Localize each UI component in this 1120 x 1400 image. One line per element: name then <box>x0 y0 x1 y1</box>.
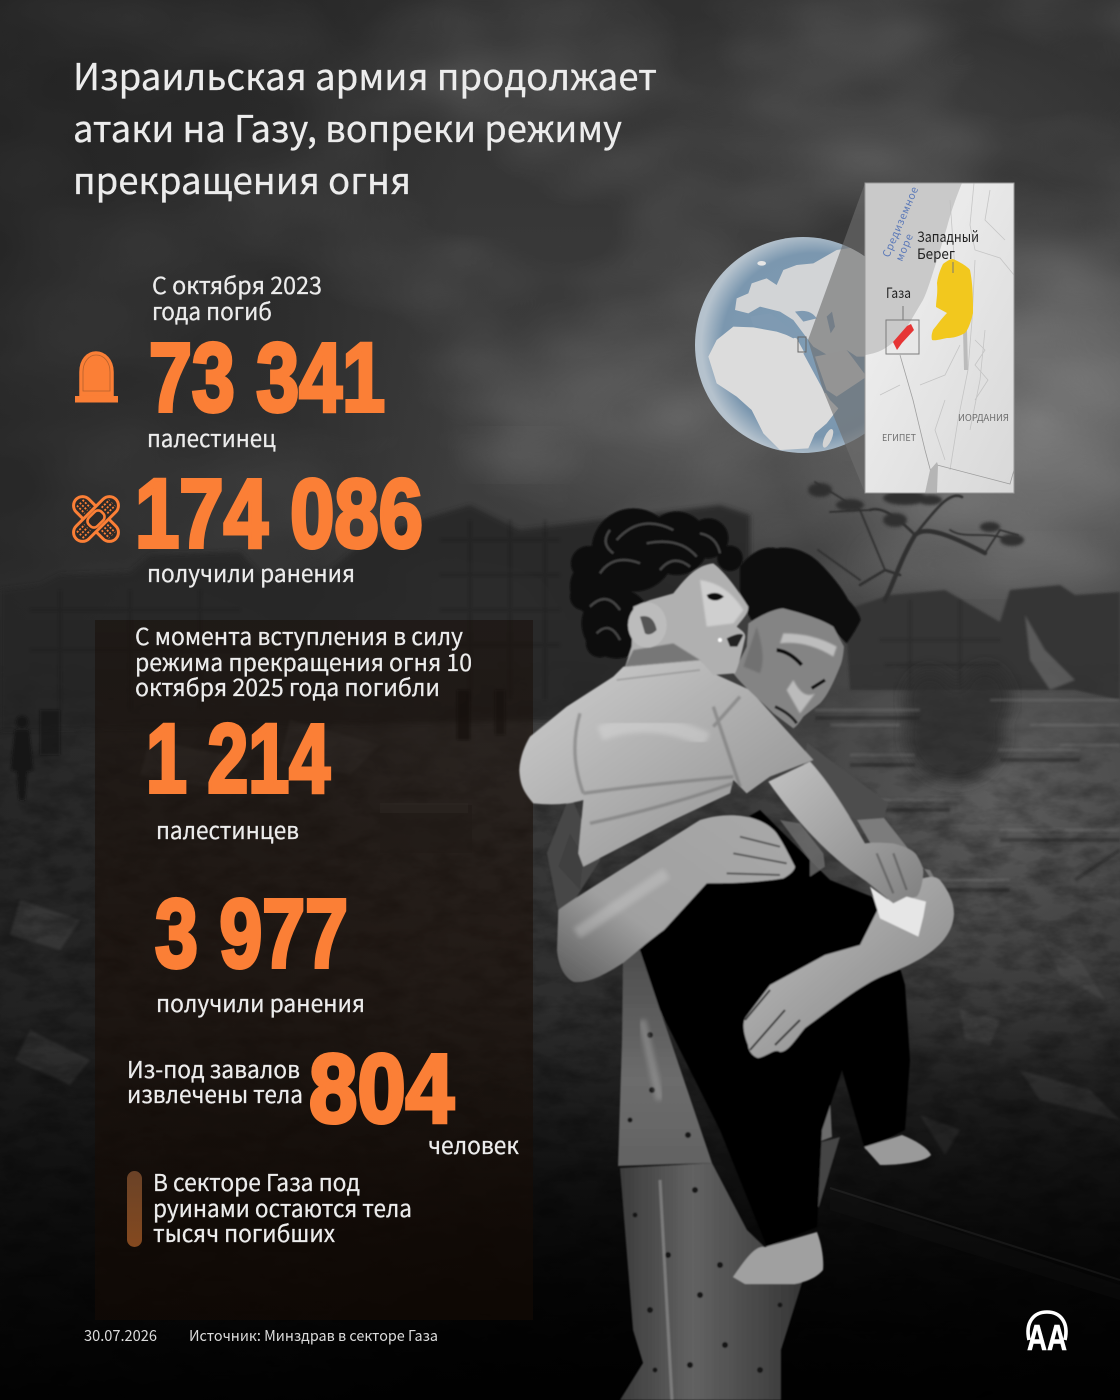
label: Palestinians since ceasefire: палестинцев <box>156 812 299 846</box>
label: people: человек <box>428 1127 519 1161</box>
label: wounded since ceasefire: получили ранения <box>156 985 365 1019</box>
seas <box>786 334 795 338</box>
sea <box>865 183 962 355</box>
child foot far <box>864 1135 931 1165</box>
distant people <box>11 690 505 800</box>
terrain relief lines <box>880 183 1014 484</box>
globe locator <box>695 237 911 453</box>
boy trousers <box>620 1163 802 1400</box>
title: Израильская армия продолжает <box>73 47 657 101</box>
accent bar <box>127 1171 142 1247</box>
icon: crossed bandages <box>70 493 122 545</box>
africa <box>708 327 838 450</box>
Gaza strip <box>893 324 914 350</box>
locator map of Gaza and West Bank <box>865 183 1014 493</box>
madagascar <box>822 429 834 448</box>
boy right arm and hand <box>744 877 954 1058</box>
shrub dark mass <box>904 666 1011 783</box>
logo: Anadolu Agency: AA <box>1027 1317 1067 1358</box>
boy shirt shoulder and sleeves <box>800 743 888 820</box>
number: killed total: 73 341 <box>149 323 385 432</box>
title <box>73 47 657 205</box>
label: sea: море <box>892 231 917 264</box>
intro text: since October 2023: С октября 2023 <box>152 267 322 301</box>
iceland <box>757 261 766 266</box>
text: bodies recovered: Из-под завалов <box>127 1051 300 1085</box>
text: bodies recovered <box>127 1051 303 1110</box>
number: killed since ceasefire: 1 214 <box>146 704 330 813</box>
icon: gravestone <box>75 352 118 402</box>
label: West Bank second line: Берег <box>917 243 955 264</box>
intro text: since October 2023: года погиб <box>152 293 272 327</box>
boy face <box>733 608 844 728</box>
date: 30.07.2026 <box>84 1325 157 1346</box>
child ear <box>628 602 667 648</box>
text: bodies recovered: извлечены тела <box>127 1076 303 1110</box>
child hair <box>570 508 743 658</box>
map frame <box>865 183 1014 493</box>
label: Egypt: ЕГИПЕТ <box>882 430 916 444</box>
child arm <box>768 762 923 903</box>
bare tree <box>808 482 1024 600</box>
text: since ceasefire: режима прекращения огня 10 <box>135 644 472 678</box>
child foot near <box>733 1232 823 1284</box>
upper figures in zoomed coordinates <box>519 508 926 982</box>
boy tunic <box>618 950 712 1166</box>
label: West Bank: Западный <box>917 226 979 247</box>
text: bodies under rubble <box>153 1164 412 1249</box>
number: wounded since ceasefire: 3 977 <box>155 879 348 988</box>
panel: ceasefire statistics <box>95 620 533 1320</box>
text: since ceasefire <box>135 618 472 703</box>
Gaza locator box <box>886 320 919 354</box>
eurasia <box>735 248 864 356</box>
printed pattern on trousers <box>780 820 825 877</box>
label: Palestinians: палестинец <box>147 420 276 454</box>
number: wounded total: 174 086 <box>135 459 423 568</box>
title: атаки на Газу, вопреки режиму <box>73 99 622 153</box>
child face <box>625 563 748 675</box>
child black trousers <box>620 810 910 1247</box>
intro text: since October 2023 <box>152 267 322 327</box>
text: since ceasefire: С момента вступления в силу <box>135 618 463 652</box>
skyline silhouette left <box>0 505 750 730</box>
label: Gaza: Газа <box>886 283 911 303</box>
rubble ground terraces <box>815 700 1120 880</box>
tissue <box>870 887 926 937</box>
skyline silhouette right <box>845 585 1120 700</box>
title: прекращения огня <box>73 151 411 205</box>
text: bodies under rubble: тысяч погибших <box>153 1215 335 1249</box>
rubble texture <box>0 723 1120 1114</box>
boy left arm <box>557 815 795 982</box>
child shirt <box>519 660 813 867</box>
label: Mediterranean sea: Средиземное <box>879 184 922 260</box>
source: Источник: Минздрав в секторе Газа <box>189 1325 438 1346</box>
label: wounded: получили ранения <box>147 555 355 589</box>
number: bodies recovered: 804 <box>309 1034 454 1143</box>
rubble blocks <box>10 720 1120 1155</box>
map zoom wedge <box>808 183 865 493</box>
boy head hair <box>740 548 861 643</box>
label: Jordan: ИОРДАНИЯ <box>958 410 1009 424</box>
arabia <box>815 350 867 397</box>
text: bodies under rubble: руинами остаются тела <box>153 1190 412 1224</box>
text: since ceasefire: октября 2025 года погибли <box>135 669 440 703</box>
West Bank <box>932 259 973 340</box>
text: bodies under rubble: В секторе Газа под <box>153 1164 360 1198</box>
photo: boy carrying a child <box>519 508 955 1400</box>
